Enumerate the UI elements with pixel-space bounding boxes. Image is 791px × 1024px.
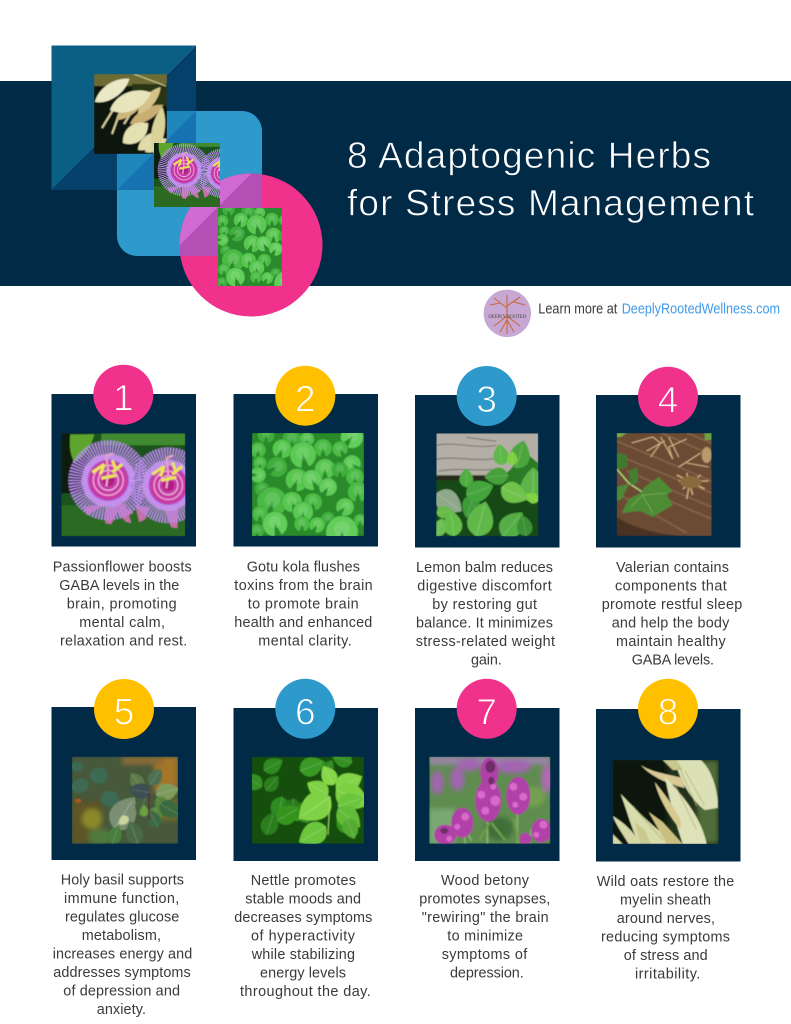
number: 3 (476, 379, 497, 420)
card panel (596, 395, 740, 548)
title (347, 135, 755, 224)
description: brain, promoting (67, 596, 177, 612)
description: metabolism, (82, 928, 161, 944)
description: components that (615, 578, 727, 594)
description: Valerian contains (616, 560, 729, 576)
photo: gotu kola (252, 433, 364, 536)
description: energy levels (260, 966, 346, 982)
description (53, 559, 192, 649)
description: Nettle promotes (251, 873, 356, 889)
photo: wood betony (429, 757, 553, 845)
description: stress-related weight (416, 634, 555, 650)
photo: gotu kola (218, 208, 282, 286)
photo: wild oats (613, 760, 719, 844)
number badge (638, 679, 698, 739)
description: Wood betony (441, 873, 530, 889)
description (416, 560, 555, 668)
photo: wild oats (94, 74, 167, 154)
description: of stress and (624, 948, 708, 964)
description: mental calm, (79, 615, 165, 631)
description: of depression and (63, 984, 180, 1000)
description: toxins from the brain (234, 578, 373, 594)
photo: valerian (617, 433, 712, 536)
description: reducing symptoms (601, 930, 730, 946)
description: GABA levels. (632, 652, 714, 668)
description (53, 872, 192, 1018)
number: 7 (476, 692, 497, 732)
description: Gotu kola flushes (247, 559, 360, 575)
description (602, 560, 742, 668)
card panel (596, 709, 740, 862)
header banner (0, 81, 791, 286)
card panel (52, 707, 196, 860)
number: 1 (113, 378, 134, 419)
description: by restoring gut (432, 597, 537, 613)
description: addresses symptoms (53, 965, 191, 981)
description: anxiety. (97, 1002, 146, 1018)
number badge (275, 679, 335, 739)
card 4: valerian (596, 367, 742, 668)
description (597, 874, 734, 982)
description: of hyperactivity (251, 928, 356, 944)
description: gain. (471, 652, 502, 668)
number badge (638, 367, 698, 427)
header graphic: overlapping shapes with herb photos (52, 46, 322, 316)
description: stable moods and (245, 892, 361, 908)
description: maintain healthy (616, 634, 726, 650)
number: 2 (295, 379, 316, 420)
link line: learn more: Learn more at (538, 301, 617, 317)
description: digestive discomfort (417, 578, 552, 594)
photo: lemon balm (436, 433, 538, 536)
description: around nerves, (617, 911, 715, 927)
card 3: lemon balm (415, 366, 560, 668)
card 2: gotu kola (234, 366, 378, 649)
description: Wild oats restore the (597, 874, 734, 890)
description: promote restful sleep (602, 597, 742, 613)
card 5: holy basil (52, 679, 196, 1018)
dark blue square (52, 46, 196, 190)
card 6: nettle (234, 679, 378, 1000)
description: regulates glucose (65, 910, 179, 926)
description: mental clarity. (258, 633, 352, 649)
number badge (275, 366, 335, 426)
description: myelin sheath (620, 892, 711, 908)
photo: nettle (252, 756, 364, 844)
card 8: wild oats (596, 679, 740, 982)
description (234, 873, 372, 1000)
card panel (234, 708, 378, 861)
number: 8 (658, 692, 678, 732)
description: depression. (450, 966, 524, 982)
photo: holy basil (72, 756, 178, 844)
description: balance. It minimizes (416, 616, 553, 632)
description: Lemon balm reduces (416, 560, 553, 576)
photo: passionflower (61, 433, 200, 536)
pink circle (180, 174, 322, 316)
number badge (93, 365, 153, 425)
description: while stabilizing (251, 947, 355, 963)
description: relaxation and rest. (60, 633, 187, 649)
description: decreases symptoms (234, 910, 372, 926)
description: symptoms of (442, 947, 528, 963)
card panel (52, 394, 196, 546)
card panel (415, 395, 560, 548)
description: GABA levels in the (59, 578, 179, 594)
number badge (457, 366, 517, 426)
number badge (94, 679, 154, 739)
description: Holy basil supports (61, 872, 184, 888)
description: immune function, (64, 891, 179, 907)
description: Passionflower boosts (53, 559, 192, 575)
number badge (457, 679, 517, 739)
description: health and enhanced (234, 615, 372, 631)
number: 6 (295, 692, 316, 732)
description: throughout the day. (240, 984, 371, 1000)
circle overlap (180, 174, 262, 256)
square overlap (117, 111, 196, 190)
description: to minimize (447, 928, 523, 944)
card panel (234, 394, 378, 546)
description: "rewiring" the brain (422, 910, 549, 926)
number: 4 (658, 380, 678, 421)
card panel (415, 708, 560, 861)
description: promotes synapses, (419, 892, 550, 908)
description: and help the body (612, 616, 730, 632)
card 1: passionflower (52, 365, 200, 649)
title: for Stress Management (347, 182, 755, 224)
logo: deeply rooted (484, 290, 531, 337)
description: increases energy and (53, 946, 192, 962)
description: to promote brain (248, 596, 359, 612)
light blue rounded square (117, 111, 262, 256)
description: irritability. (635, 966, 700, 982)
photo: passionflower (154, 143, 220, 207)
description (419, 873, 550, 982)
title: 8 Adaptogenic Herbs (347, 135, 711, 176)
logo: deeply rooted: DEEPLY ROOTED (488, 315, 527, 320)
number: 5 (114, 691, 134, 732)
description (234, 559, 373, 649)
card 7: wood betony (415, 679, 560, 982)
